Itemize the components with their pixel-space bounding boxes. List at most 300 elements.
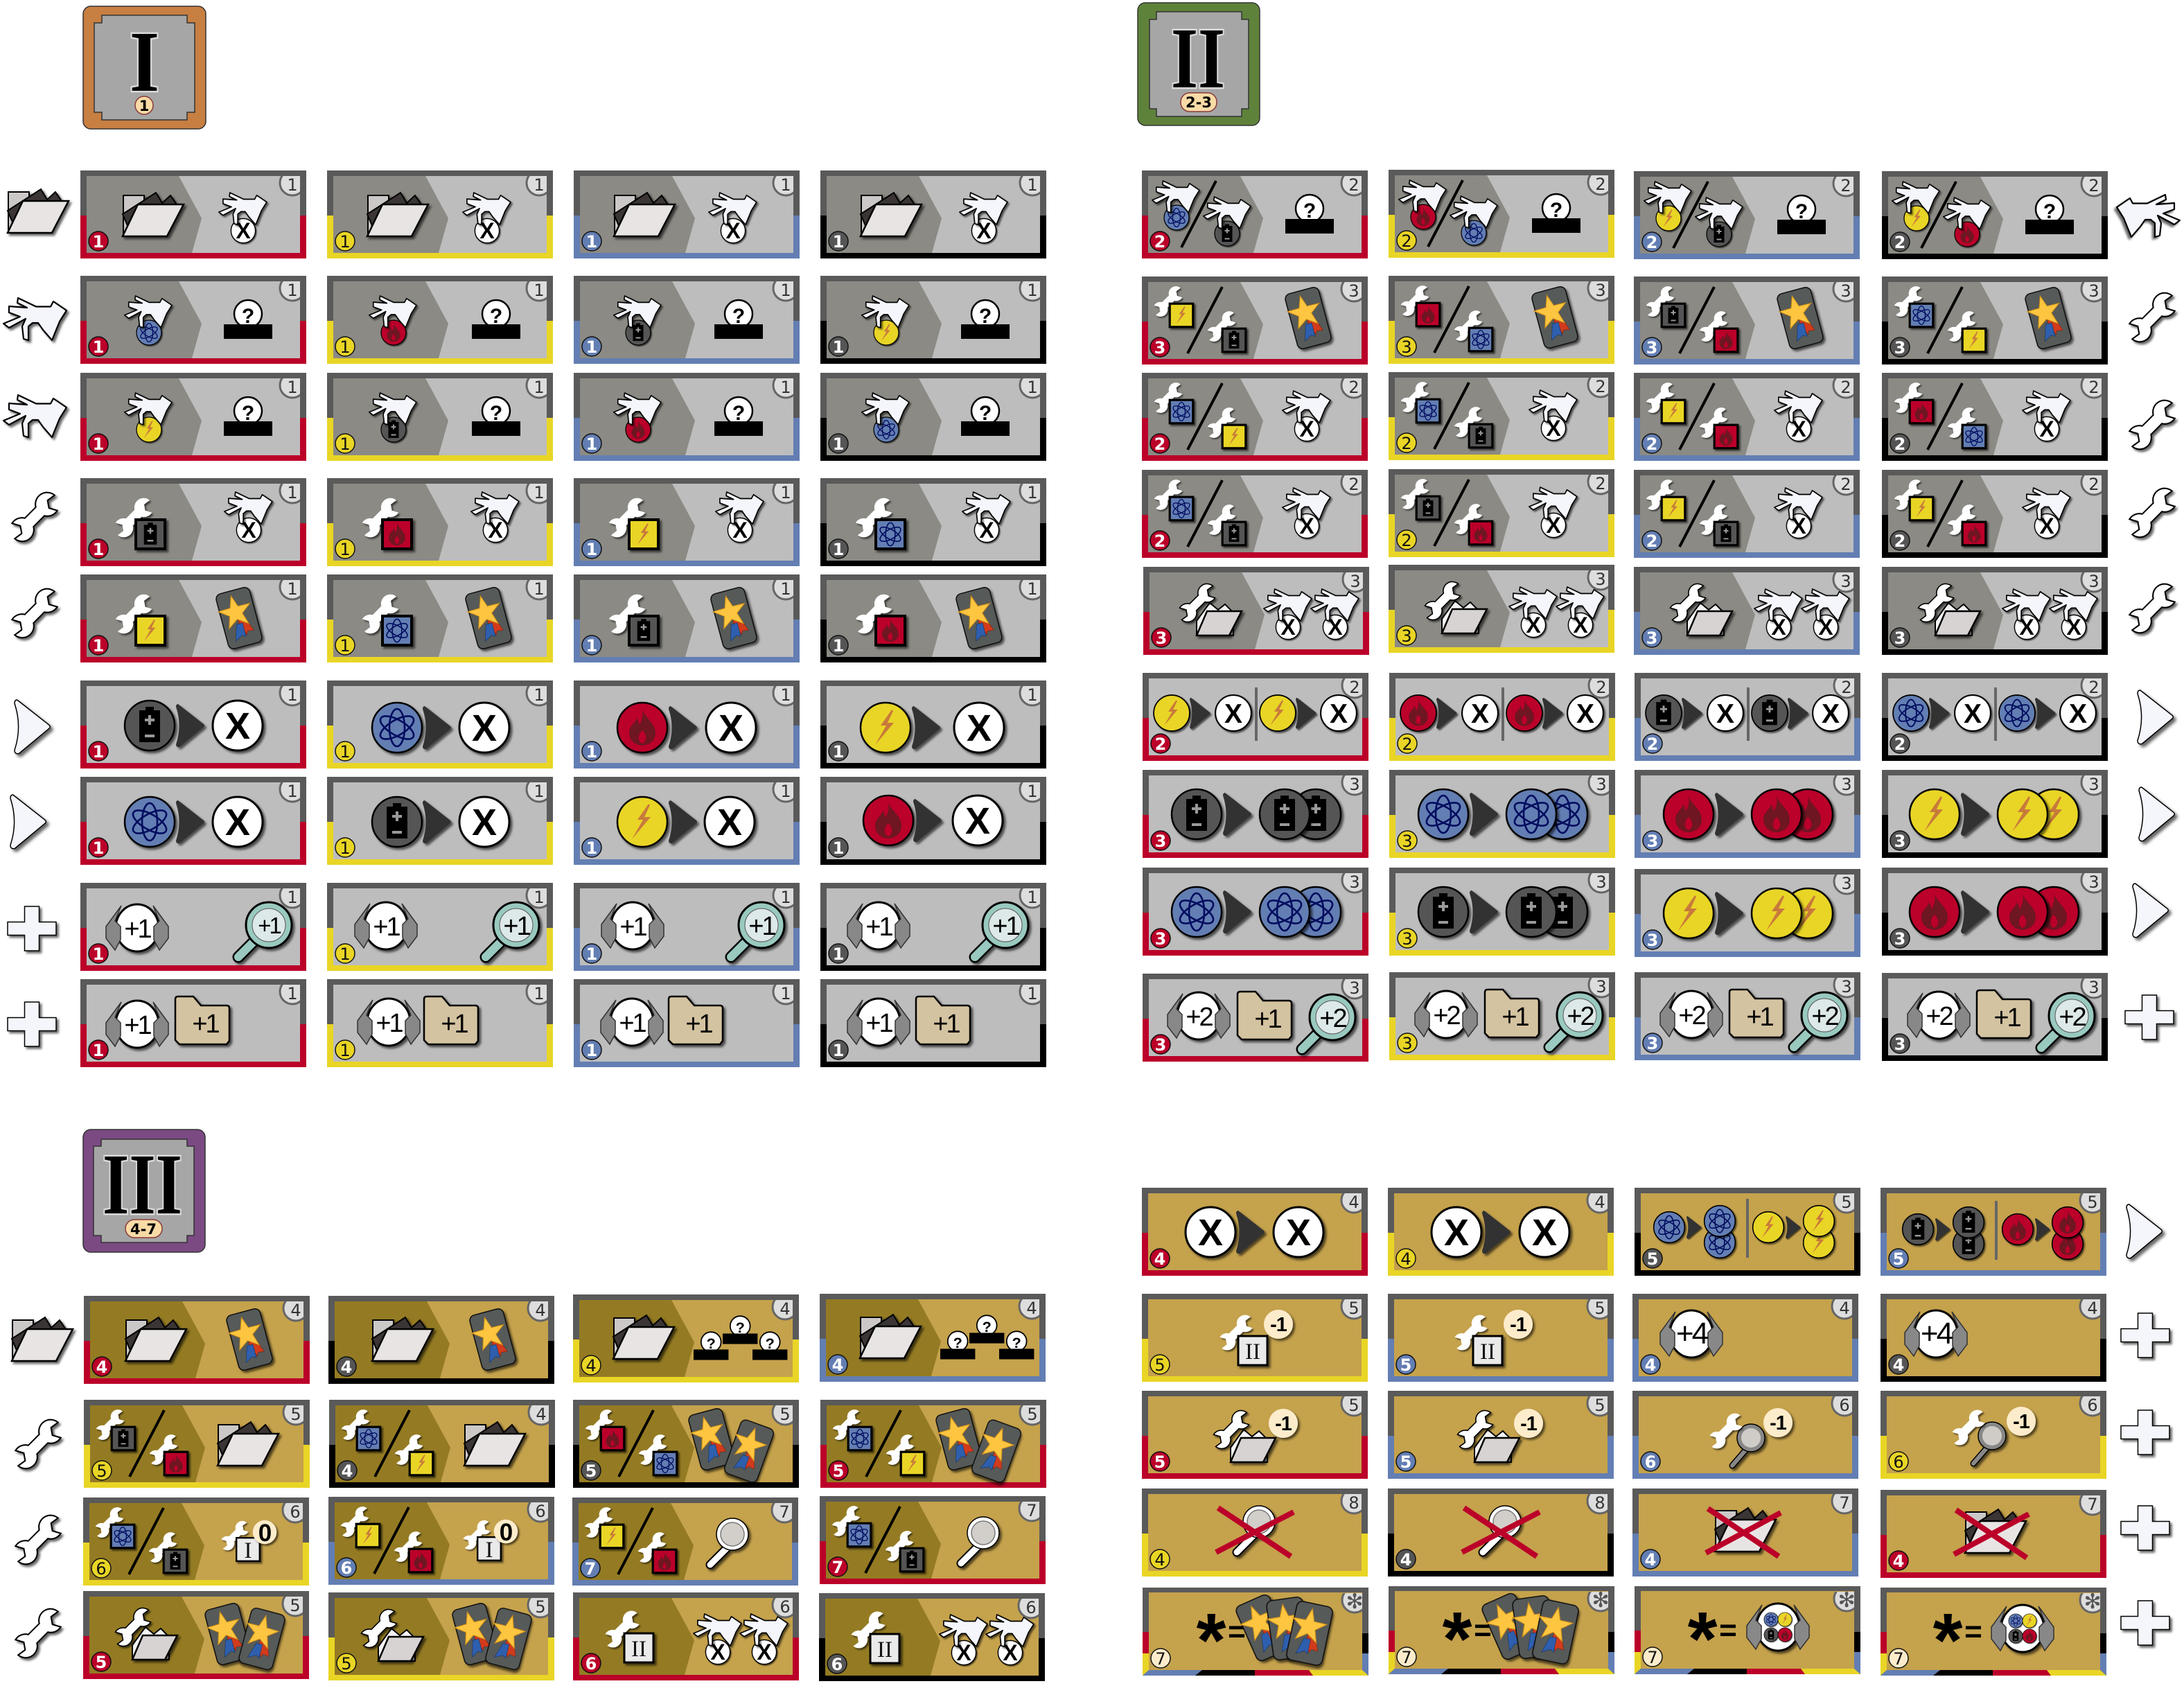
card II r1 black	[1882, 171, 2108, 259]
cost: 3	[2088, 978, 2099, 997]
card II r9 blue: +2	[1811, 1002, 1839, 1031]
tier	[1642, 337, 1662, 358]
cost	[1020, 170, 1045, 195]
cost	[527, 170, 552, 195]
card III r2 black b	[573, 1400, 799, 1491]
card II r9 yellow: +2	[1567, 1002, 1594, 1031]
tier	[1643, 734, 1662, 754]
card I r8 blue	[574, 883, 800, 971]
tier: 1	[586, 742, 597, 762]
cost	[2081, 567, 2106, 592]
card II r5 yellow: X	[1526, 613, 1541, 638]
tier: 2	[1894, 233, 1905, 252]
cost	[1587, 1188, 1612, 1213]
tier	[1150, 1549, 1170, 1570]
card I r9 yellow: +1	[441, 1010, 468, 1039]
tier: 2	[1401, 434, 1412, 453]
tier	[1151, 1649, 1170, 1669]
card II r2 blue	[1634, 276, 1860, 364]
tier: 2	[1894, 735, 1905, 754]
card IV r4 yellow	[1142, 1488, 1368, 1576]
tier	[582, 337, 601, 357]
tier: 5	[1647, 1249, 1658, 1269]
tier	[1150, 231, 1170, 252]
card I r2 red	[80, 276, 306, 364]
tier: 3	[1646, 338, 1657, 358]
card II r3 black	[1882, 373, 2108, 461]
cost	[772, 1497, 797, 1522]
icon: plus row IV-4	[2121, 1506, 2169, 1550]
icon: wrench row I-4	[6, 488, 64, 546]
card IV r5 wild tokens b: =	[1964, 1615, 1982, 1649]
card I r3 yellow: ?	[490, 402, 502, 425]
cost: 5	[1348, 1299, 1359, 1318]
cost: 1	[1027, 782, 1038, 801]
cost: 6	[2087, 1396, 2098, 1415]
card IV r2 blue: II	[1480, 1340, 1495, 1364]
tier	[335, 838, 355, 858]
tier: 5	[96, 1461, 107, 1481]
cost	[2080, 1294, 2105, 1319]
cost	[773, 1294, 798, 1319]
cost	[1589, 673, 1614, 698]
cost	[773, 1400, 798, 1425]
tier	[337, 1461, 357, 1481]
card I r9 yellow	[327, 979, 553, 1067]
tier	[1151, 1035, 1170, 1055]
card II r4 black	[1882, 470, 2108, 558]
card III r4 black: II	[877, 1637, 892, 1662]
cost: 6	[290, 1502, 301, 1522]
card I r9 black: +1	[865, 1009, 893, 1038]
card III r3 red	[820, 1496, 1046, 1584]
cost	[773, 276, 798, 301]
tier: 1	[586, 838, 597, 858]
tier: 1	[93, 1041, 104, 1060]
card IV r5 wild tokens b	[1881, 1588, 2106, 1683]
tier: 3	[1402, 1034, 1413, 1053]
cost	[527, 680, 552, 705]
cost: 3	[1595, 281, 1606, 300]
tier: 3	[1894, 832, 1905, 851]
tier	[335, 1040, 355, 1060]
tier	[829, 434, 848, 454]
icon: plus row IV-2	[2121, 1313, 2169, 1358]
cost	[1342, 770, 1367, 795]
cost: 1	[534, 685, 545, 705]
tier	[1642, 232, 1662, 252]
card I r5 red	[80, 574, 306, 662]
card I r7 red: X	[225, 802, 250, 843]
cost: 4	[1348, 1193, 1359, 1212]
cost	[1343, 567, 1368, 592]
cost: 1	[287, 378, 298, 397]
cost	[2081, 171, 2106, 196]
cost: 1	[1027, 175, 1038, 195]
card I r1 yellow: X	[479, 218, 495, 243]
cost	[280, 883, 305, 908]
cost: 3	[2088, 872, 2099, 892]
tier	[1151, 734, 1170, 754]
cost	[1589, 770, 1614, 795]
cost	[773, 883, 798, 908]
cost	[527, 276, 552, 301]
card II r4 red: X	[1299, 513, 1314, 538]
card II r1 blue	[1634, 171, 1860, 259]
cost: 2	[2088, 678, 2099, 697]
cost	[773, 680, 798, 705]
cost	[527, 478, 552, 503]
card IV r5 wild stars b: *	[1443, 1597, 1472, 1682]
tier	[1396, 1452, 1416, 1472]
tier: 3	[1401, 626, 1412, 646]
cost	[1341, 373, 1366, 398]
cost	[1588, 372, 1613, 397]
card II r5 black	[1882, 567, 2108, 655]
card II r4 blue	[1634, 470, 1860, 558]
tier	[89, 838, 108, 858]
tier	[1890, 628, 1910, 648]
tier: 3	[1154, 338, 1165, 358]
tier: 1	[586, 1041, 597, 1060]
card II r5 blue: X	[1818, 615, 1833, 640]
card II r5 yellow	[1389, 565, 1614, 653]
card III r1 blue	[820, 1294, 1046, 1382]
tier: 1	[586, 636, 597, 656]
cost	[280, 680, 305, 705]
tier	[1641, 1452, 1660, 1472]
card I r2 black	[820, 276, 1046, 364]
card II r3 red: X	[1299, 416, 1314, 441]
card II r3 red	[1142, 373, 1368, 461]
cost	[1020, 574, 1045, 599]
card I r8 black: +1	[992, 912, 1020, 941]
card II r3 blue	[1634, 373, 1860, 461]
tier header: II: 2-3	[1186, 94, 1212, 111]
cost	[1588, 565, 1613, 590]
tier: 2	[1154, 532, 1165, 551]
card I r8 black	[820, 883, 1046, 971]
tier: 1	[340, 337, 351, 357]
cost: 2	[1595, 175, 1606, 194]
card IV r5 wild stars a	[1143, 1588, 1368, 1683]
icon: arrow row I-6	[15, 700, 50, 754]
tier	[1890, 531, 1910, 551]
card IV r5 wild stars b	[1389, 1586, 1614, 1682]
cost: 1	[780, 782, 791, 801]
tier: 1	[93, 636, 104, 656]
cost: 1	[1027, 984, 1038, 1003]
tier: 7	[1647, 1648, 1658, 1667]
card I r6 blue	[574, 680, 800, 768]
tier: 2	[1894, 434, 1905, 454]
card III r3 yellow	[83, 1497, 309, 1586]
card II r2 black	[1882, 276, 2108, 364]
cost: 2	[1596, 678, 1607, 697]
tier	[89, 944, 108, 964]
cost: 1	[534, 888, 545, 907]
icon: arrow row IV-1	[2126, 1204, 2162, 1258]
card IV r5 wild tokens a	[1635, 1586, 1860, 1682]
tier: 1	[340, 434, 351, 454]
tier	[1890, 831, 1910, 851]
card II r8 black	[1882, 868, 2108, 956]
cost: 3	[1841, 977, 1852, 996]
tier	[582, 635, 601, 656]
card IV r3 blue b: -1	[1770, 1412, 1787, 1434]
icon: wrench row II-5	[2123, 579, 2181, 638]
card III r2 yellow	[84, 1400, 310, 1488]
card III r4 red b: X	[757, 1640, 772, 1665]
tier	[1890, 1034, 1910, 1054]
icon: wrench row III-3	[9, 1511, 67, 1569]
cost	[1834, 1586, 1859, 1612]
cost: 1	[780, 984, 791, 1003]
cost: 2	[1595, 474, 1606, 493]
tier: 3	[1647, 931, 1658, 950]
cost: 3	[2088, 572, 2099, 591]
cost	[280, 979, 305, 1004]
cost	[1019, 1496, 1044, 1521]
tier	[337, 1653, 356, 1674]
tier: 1	[833, 742, 844, 762]
card II r2 red	[1142, 276, 1368, 364]
tier	[1397, 626, 1416, 646]
tier	[1150, 1452, 1170, 1472]
card I r3 red	[80, 373, 306, 461]
cost	[1587, 1488, 1612, 1513]
card II r6 yellow	[1389, 673, 1615, 761]
card II r1 red	[1142, 170, 1368, 258]
icon: plus row IV-3	[2121, 1410, 2169, 1455]
card II r1 yellow	[1389, 170, 1614, 258]
cost: 2	[1348, 175, 1359, 195]
cost: 4	[290, 1301, 301, 1320]
card IV r2 yellow: II	[1245, 1340, 1260, 1364]
cost	[1341, 1391, 1366, 1416]
cost	[527, 373, 552, 398]
tier header: III: 4-7	[130, 1221, 157, 1238]
card I r2 yellow	[327, 276, 553, 364]
tier: 1	[833, 540, 844, 559]
tier: 1	[340, 945, 351, 964]
card II r1 red: ?	[1303, 200, 1316, 222]
card II r7 blue	[1635, 770, 1860, 858]
card I r2 yellow: ?	[490, 305, 502, 328]
cost: 5	[290, 1596, 301, 1615]
card I r1 blue	[574, 170, 800, 258]
tier: 3	[1401, 337, 1412, 357]
tier	[1890, 929, 1910, 949]
card II r6 yellow: X	[1576, 699, 1594, 729]
card II r3 yellow: X	[1546, 416, 1561, 441]
card I r1 black	[820, 170, 1046, 258]
card I r2 red: ?	[242, 305, 254, 328]
cost: 2	[1348, 475, 1359, 494]
tier: 1	[833, 337, 844, 357]
cost	[1341, 1488, 1366, 1513]
card II r5 blue	[1634, 567, 1860, 655]
tier: 6	[831, 1655, 843, 1674]
tier	[829, 539, 848, 559]
tier	[829, 741, 848, 762]
cost: 3	[1840, 281, 1851, 301]
tier: 1	[833, 1041, 844, 1060]
card II r1 black: ?	[2043, 200, 2056, 223]
tier: 2	[1401, 231, 1412, 251]
card II r5 red: X	[1280, 615, 1296, 640]
tier	[92, 1357, 112, 1377]
cost	[1834, 770, 1859, 795]
tier	[1150, 531, 1170, 551]
tier: 1	[93, 540, 104, 559]
card I r4 blue: X	[732, 518, 748, 543]
cost: 1	[1027, 378, 1038, 397]
tier: 4	[585, 1356, 597, 1376]
tier	[581, 1355, 601, 1376]
card I r6 yellow	[327, 680, 553, 768]
tier	[829, 337, 848, 357]
icon: arrow row II-7	[2139, 787, 2174, 841]
card IV r3 blue b	[1632, 1391, 1858, 1479]
tier: 7	[832, 1558, 843, 1577]
tier	[335, 231, 355, 252]
tier	[1150, 1355, 1170, 1375]
tier	[1889, 1551, 1908, 1571]
card II r9 red: +2	[1319, 1004, 1347, 1033]
tier	[582, 539, 601, 559]
tier: 5	[341, 1654, 352, 1674]
tier: 2	[1154, 434, 1165, 454]
cost	[1834, 972, 1859, 997]
tier: 7	[1401, 1648, 1412, 1667]
tier: 6	[1645, 1452, 1656, 1472]
tier: 5	[1893, 1249, 1904, 1269]
tier	[1396, 1549, 1416, 1570]
cost	[1834, 869, 1859, 894]
tier: 3	[1155, 1035, 1166, 1055]
card I r4 red	[80, 478, 306, 566]
tier header: II	[1138, 3, 1260, 125]
tier	[1150, 1249, 1170, 1269]
card IV r1 black	[1635, 1188, 1860, 1276]
cost	[1832, 1294, 1857, 1319]
card II r4 yellow	[1389, 469, 1614, 557]
tier	[335, 539, 355, 559]
tier: 5	[1400, 1452, 1411, 1472]
tier header: II: II	[1171, 11, 1225, 107]
tier	[1642, 434, 1662, 454]
card II r6 blue	[1635, 673, 1860, 761]
cost	[1832, 1391, 1857, 1416]
tier	[1398, 929, 1417, 949]
tier	[1152, 628, 1171, 648]
card I r9 red: +1	[124, 1011, 152, 1040]
cost	[528, 1497, 553, 1522]
cost	[1341, 276, 1366, 301]
tier	[1643, 1249, 1662, 1269]
card II r5 red: X	[1328, 615, 1343, 640]
card II r4 red	[1142, 470, 1368, 558]
card IV r1 blue	[1881, 1188, 2106, 1276]
cost: 1	[287, 175, 298, 195]
tier: 1	[340, 838, 351, 858]
tier	[89, 635, 108, 656]
card II r6 yellow: X	[1471, 699, 1489, 729]
cost	[2080, 1490, 2105, 1515]
cost: 3	[2088, 281, 2099, 301]
card IV r3 red	[1142, 1391, 1368, 1479]
card I r3 yellow	[327, 373, 553, 461]
cost	[1589, 972, 1614, 997]
tier: 6	[96, 1559, 107, 1579]
cost	[1588, 1586, 1613, 1612]
tier: 1	[340, 1041, 351, 1060]
tier	[335, 635, 355, 656]
cost: 2	[1349, 678, 1360, 697]
tier header: I: 1	[139, 98, 149, 114]
cost: 8	[1594, 1493, 1605, 1513]
cost: 5	[2087, 1193, 2098, 1212]
tier header: I	[83, 6, 206, 129]
cost: 1	[287, 281, 298, 300]
tier	[1643, 1033, 1662, 1053]
card I r7 blue: X	[717, 802, 742, 843]
cost	[773, 170, 798, 195]
card I r6 black	[820, 680, 1046, 768]
card I r3 blue: ?	[732, 402, 745, 425]
card III r2 red	[820, 1400, 1046, 1491]
icon: wrench row III-2	[9, 1415, 67, 1473]
cost	[1020, 680, 1045, 705]
tier: 7	[1893, 1649, 1904, 1669]
icon: folder row III-1	[12, 1317, 73, 1361]
tier	[337, 1357, 356, 1377]
card II r6 red: X	[1224, 699, 1242, 729]
icon: wrench row I-5	[6, 584, 64, 642]
cost: 5	[1594, 1396, 1605, 1415]
card IV r4 black	[1388, 1488, 1614, 1576]
tier	[829, 635, 848, 656]
tier: 2	[1894, 532, 1905, 551]
card III r4 red b: X	[710, 1640, 725, 1665]
tier: 3	[1155, 929, 1166, 949]
tier header: III: III	[103, 1137, 182, 1233]
card IV r2 blue: -1	[1510, 1314, 1527, 1336]
card I r9 red	[80, 979, 306, 1067]
cost	[1588, 469, 1613, 494]
card IV r3 blue: -1	[1520, 1413, 1538, 1435]
card III r1 yellow	[573, 1294, 799, 1382]
card I r5 black	[820, 574, 1046, 662]
tier	[581, 1558, 600, 1579]
cost: 7	[1026, 1501, 1037, 1520]
card IV r5 wild stars a: *	[1197, 1598, 1226, 1683]
tier	[1151, 929, 1170, 949]
cost	[527, 574, 552, 599]
cost: 1	[1027, 685, 1038, 705]
cost: 1	[780, 378, 791, 397]
tier	[1150, 434, 1170, 454]
card II r3 black: X	[2039, 416, 2054, 441]
card II r9 blue: +2	[1678, 1001, 1706, 1030]
tier: 5	[585, 1461, 597, 1481]
tier: 6	[585, 1654, 597, 1674]
cost: 1	[534, 175, 545, 195]
tier: 5	[1400, 1355, 1411, 1375]
cost	[1588, 170, 1613, 195]
card IV r1 yellow: X	[1532, 1212, 1557, 1254]
